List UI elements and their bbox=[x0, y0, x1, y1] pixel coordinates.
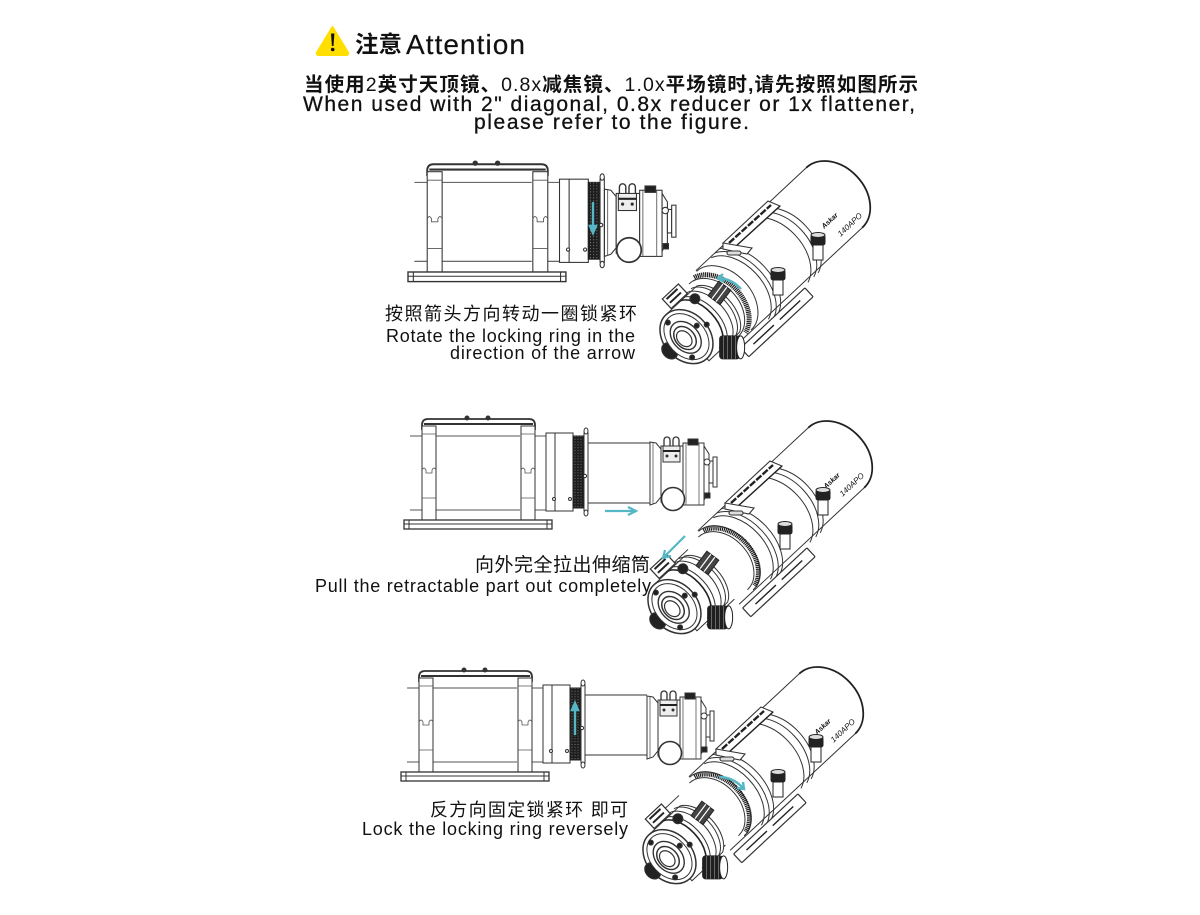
diagram: step 2 perspective view bbox=[623, 405, 899, 667]
panel: step 2 bbox=[315, 405, 899, 667]
diagram: step 1 side view bbox=[408, 161, 676, 282]
diagram: step 3 side view bbox=[401, 668, 714, 781]
arrow: rotate up bbox=[572, 703, 578, 735]
heading: 注意: 注意 bbox=[355, 31, 402, 57]
arrow: pull right bbox=[605, 507, 636, 515]
intro English line 2: please refer to the figure. bbox=[474, 111, 749, 134]
heading: Attention: Attention bbox=[406, 29, 525, 60]
label: step 3 Chinese: 反方向固定锁紧环 即可 bbox=[430, 800, 628, 820]
label: step 3 English: Lock the locking ring reversely bbox=[362, 819, 628, 839]
arrow: pull out bbox=[663, 536, 685, 558]
diagram: step 3 perspective view bbox=[618, 651, 890, 915]
icon: warning triangle bbox=[317, 27, 348, 55]
diagram: step 1 perspective view bbox=[635, 145, 897, 397]
text block: intro bbox=[303, 73, 918, 134]
label: step 1 Chinese: 按照箭头方向转动一圈锁紧环 bbox=[385, 304, 637, 324]
intro Chinese line: 当使用2英寸天顶镜、0.8x减焦镜、1.0x平场镜时,请先按照如图所示 bbox=[304, 73, 918, 96]
diagram: step 2 side view bbox=[404, 416, 717, 529]
arrow: reverse ring bbox=[719, 777, 744, 789]
label: step 2 Chinese: 向外完全拉出伸缩筒 bbox=[475, 554, 650, 576]
panel: attention header bbox=[317, 27, 525, 60]
label: step 1 English line 1: Rotate the locking ring in the bbox=[386, 326, 635, 346]
intro English line 1: When used with 2" diagonal, 0.8x reducer or 1x flattener, bbox=[303, 93, 915, 116]
panel: step 3 bbox=[362, 651, 890, 915]
panel: step 1 bbox=[385, 145, 897, 397]
label: step 2 English: Pull the retractable part out completely bbox=[315, 576, 651, 596]
arrow: rotate down bbox=[590, 202, 596, 233]
arrow: rotate ring bbox=[718, 274, 741, 289]
label: step 1 English line 2: direction of the arrow bbox=[450, 343, 636, 363]
